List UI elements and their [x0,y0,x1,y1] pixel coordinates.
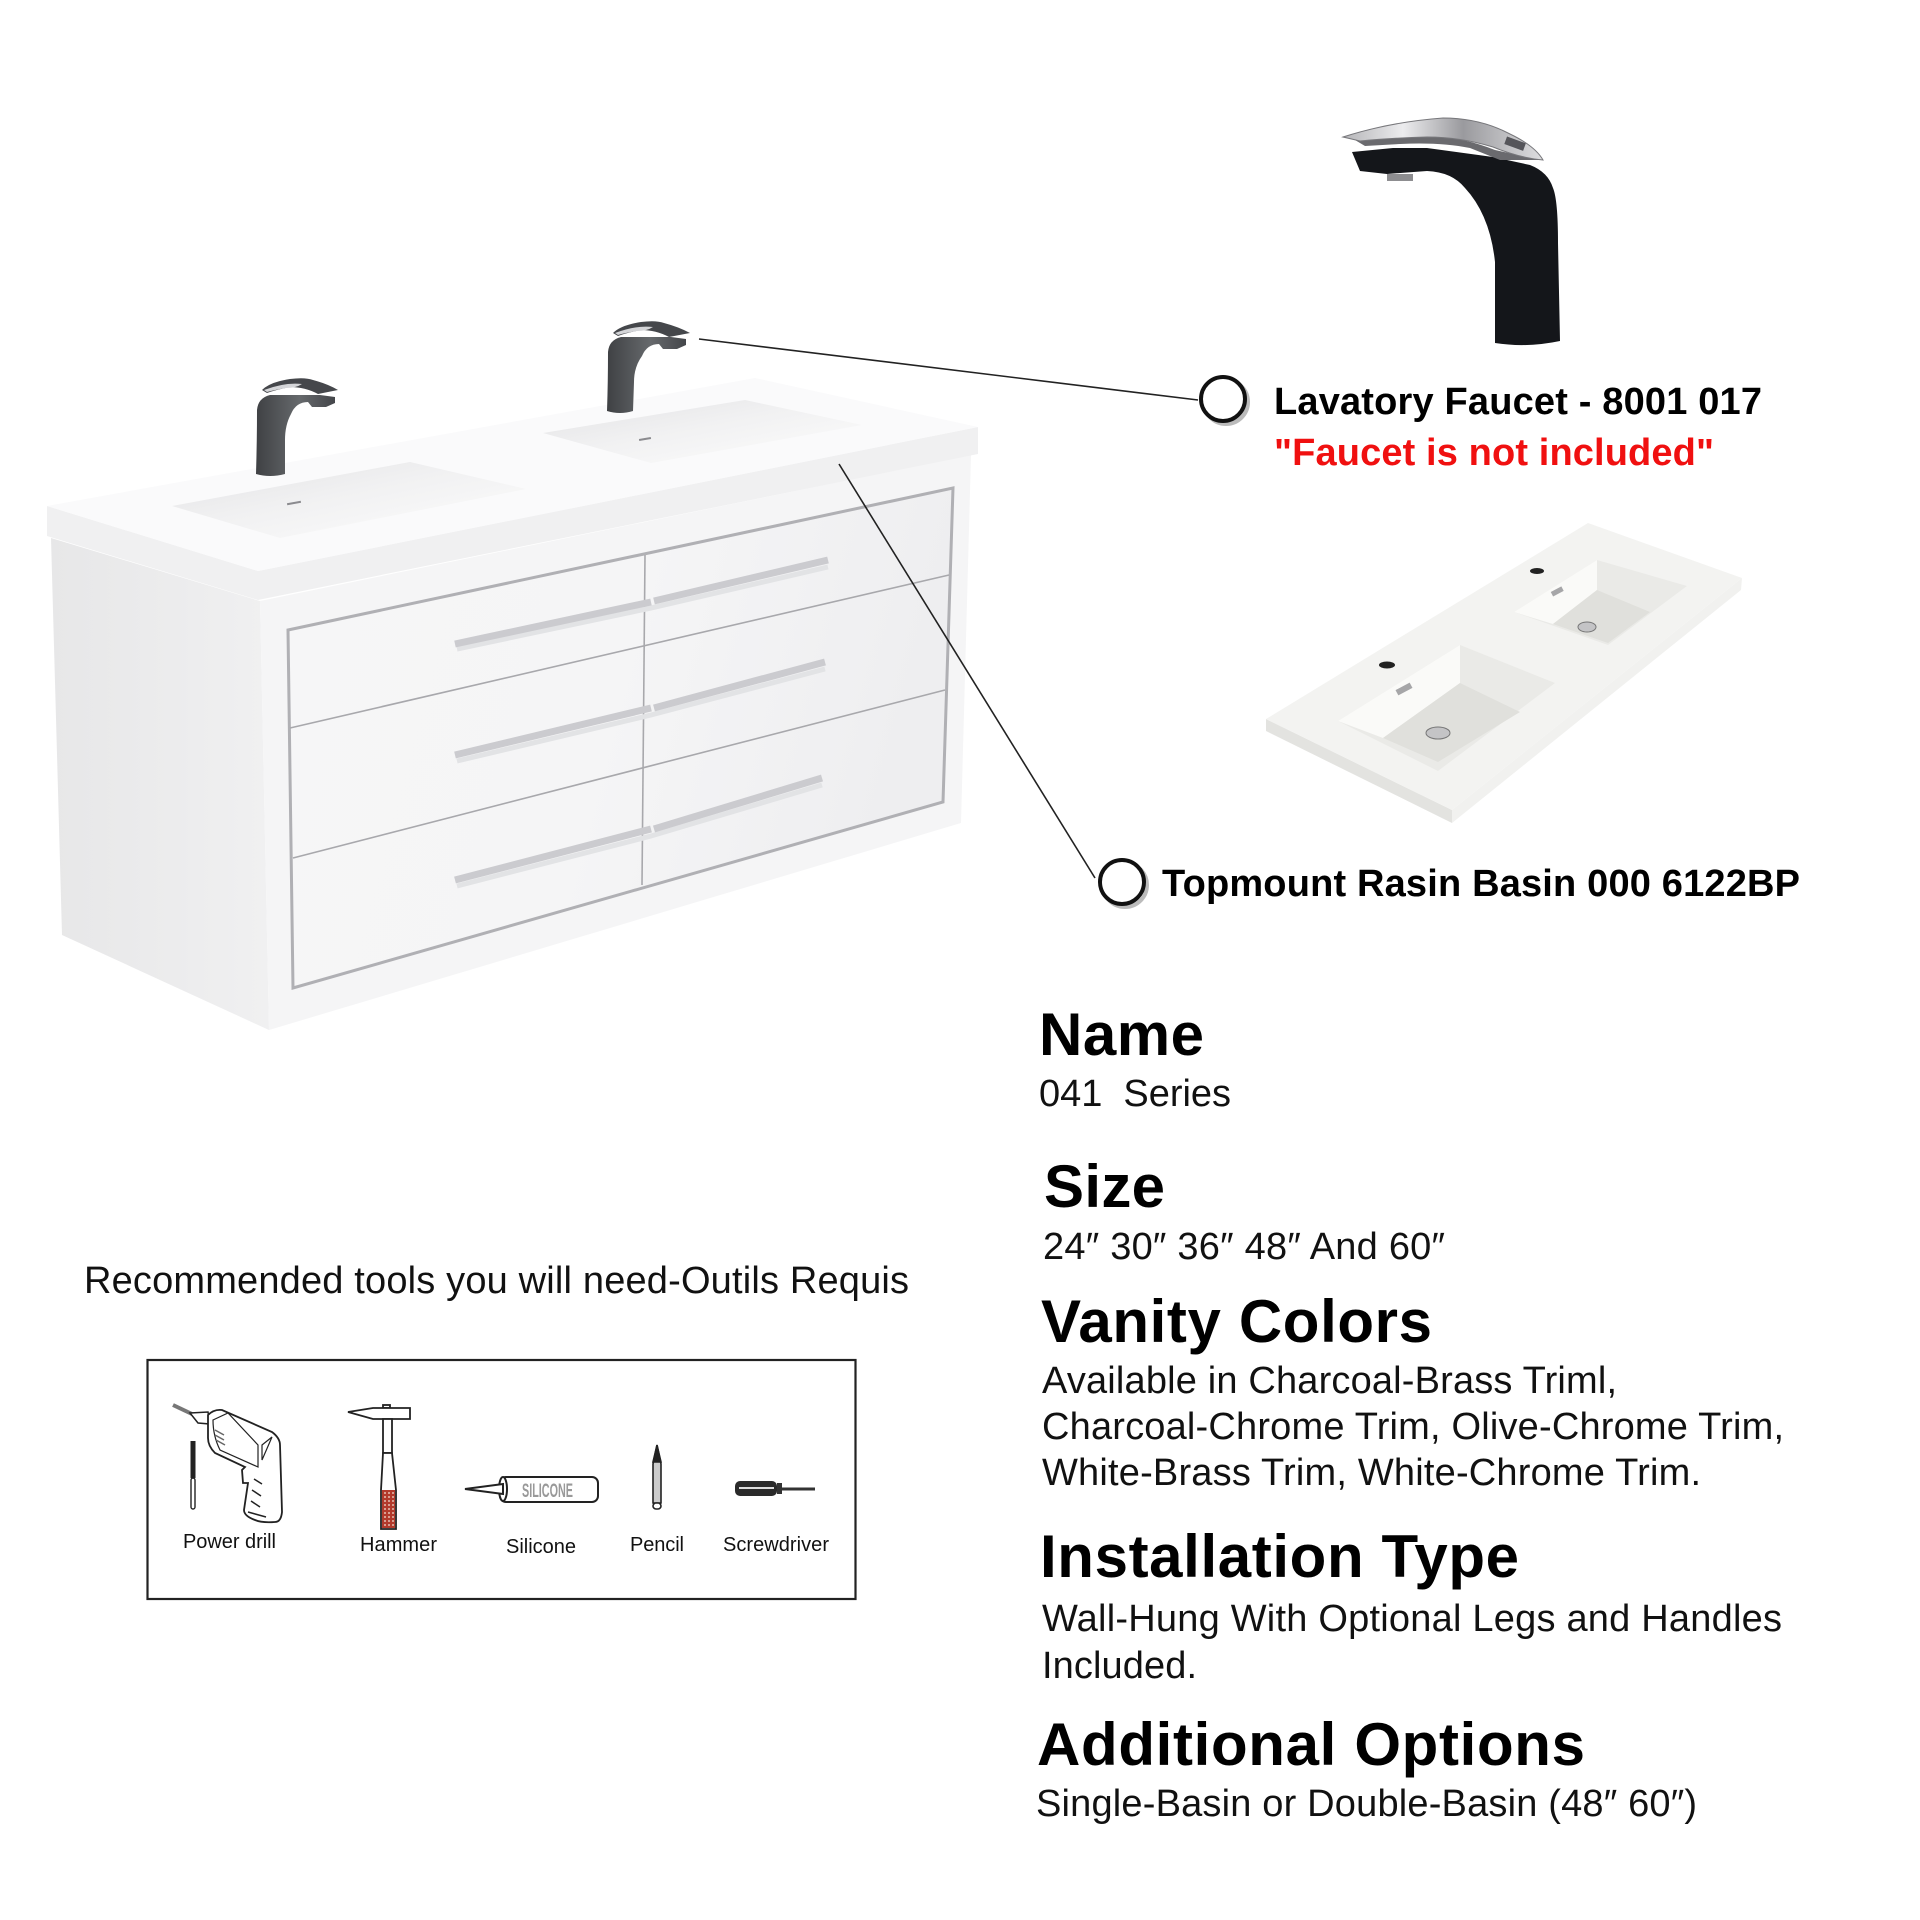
text: sizes: 24″ 30″ 36″ 48″ And 60″ [1043,1226,1445,1268]
label: faucet not included: "Faucet is not included" [1274,432,1714,474]
label: power drill: Power drill [183,1531,276,1553]
cabinet front frame [260,455,971,1030]
text: installation details [1042,1598,1782,1687]
icon: pencil [653,1445,661,1509]
text: series: 041 Series [1039,1073,1231,1115]
text: installation details: Wall-Hung With Optional Legs and Handles [1042,1598,1782,1640]
label: silicone: Silicone [506,1536,576,1558]
heading: size: Size [1044,1153,1165,1220]
cabinet left side [51,538,269,1030]
icon: silicone tube: SILICONE [522,1481,573,1502]
text: colour options: Available in Charcoal-Brass Triml, [1042,1360,1617,1402]
overflow slots [287,437,651,505]
heading: installation type: Installation Type [1040,1523,1519,1590]
icon: silicone tube [465,1477,598,1502]
label: basin name: Topmount Rasin Basin 000 6122BP [1162,863,1800,905]
text: colour options: Charcoal-Chrome Trim, Olive-Chrome Trim, [1042,1406,1784,1448]
leader line: basin [839,464,1095,878]
left basin [172,462,526,538]
right faucet on vanity [607,321,690,413]
icon: double basin countertop [1266,523,1742,823]
heading: vanity colors: Vanity Colors [1041,1288,1432,1355]
panel: tools [148,1360,856,1599]
icon: hammer [348,1405,410,1529]
drawer handles [455,560,828,886]
leader line: faucet [699,339,1198,400]
heading: additional options: Additional Options [1037,1711,1585,1778]
heading: name: Name [1039,1001,1204,1068]
text: installation details: Included. [1042,1645,1197,1687]
callout marker: basin [1100,860,1147,907]
icon: power drill [173,1405,282,1522]
vanity cabinet [47,321,978,1030]
label: faucet name: Lavatory Faucet - 8001 017 [1274,381,1762,423]
icon: black faucet [1343,118,1560,345]
label: pencil: Pencil [630,1534,684,1556]
drawer dividers [290,555,949,885]
drawer panel [288,488,953,988]
icon: screwdriver [735,1481,815,1496]
countertop front edge [47,427,978,600]
callout marker: faucet [1201,377,1248,424]
right basin [543,400,862,463]
text: options details: Single-Basin or Double-Basin (48″ 60″) [1036,1783,1697,1825]
countertop surface [47,378,978,571]
text: colour options: White-Brass Trim, White-Chrome Trim. [1042,1452,1701,1494]
label: hammer: Hammer [360,1534,437,1556]
label: screwdriver: Screwdriver [723,1534,829,1556]
heading: recommended tools: Recommended tools you will need-Outils Requis [84,1260,909,1302]
text: colour options [1042,1360,1784,1494]
left faucet on vanity [256,378,338,476]
tools frame [148,1360,856,1599]
